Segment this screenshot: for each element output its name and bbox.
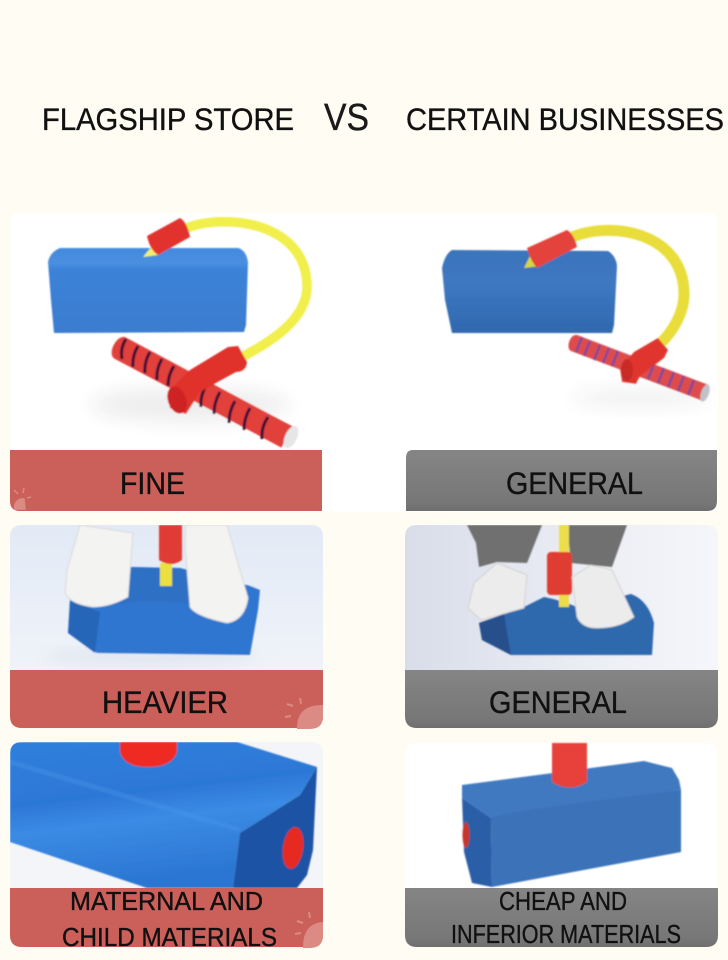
icon: foam block top — [462, 761, 681, 818]
panel: generic product, general — [442, 230, 712, 408]
label bar: general (row 1): GENERAL — [506, 465, 643, 501]
label bar: cheap and inferior materials: CHEAP AND — [499, 886, 627, 916]
photo contents — [10, 742, 317, 888]
photo contents — [40, 525, 260, 663]
label bar: maternal and child materials: MATERNAL AND — [70, 886, 263, 916]
icon: yellow tube — [570, 230, 684, 344]
icon: block top face — [120, 566, 249, 603]
icon: foam block cut end — [233, 767, 317, 888]
label bar: fine — [10, 450, 322, 511]
panel: flagship, heavier photo — [10, 525, 323, 672]
title row — [42, 97, 724, 139]
heading: vs: VS — [324, 97, 369, 139]
label bar: fine: FINE — [120, 465, 185, 501]
label bar: cheap and inferior materials: INFERIOR MATERIALS — [451, 919, 681, 949]
icon: left shoe — [468, 563, 527, 620]
icon: red pole — [552, 743, 587, 788]
label bar: maternal and child materials — [10, 886, 323, 952]
floor shadow — [40, 651, 260, 663]
label bar: general (row 2) — [405, 670, 718, 728]
icon: yellow tip — [143, 245, 158, 257]
decoration: flower — [14, 488, 31, 509]
icon: block dark side — [68, 600, 100, 653]
icon: red grip on tube — [147, 218, 190, 255]
icon: yellow tube — [160, 563, 172, 586]
photo contents — [467, 525, 654, 655]
label bar: cheap and inferior materials — [405, 886, 718, 949]
label bar: heavier: HEAVIER — [102, 684, 228, 720]
icon: red pole — [159, 525, 182, 564]
photo contents — [462, 743, 681, 887]
icon: red hole — [462, 822, 470, 848]
icon: yellow pole — [559, 525, 569, 607]
icon: right shoe — [185, 525, 248, 623]
icon: handle — [108, 334, 302, 450]
icon: thick block — [68, 567, 260, 655]
icon: handle — [566, 333, 712, 403]
icon: right trouser leg — [567, 525, 627, 567]
icon: foam block front — [491, 790, 681, 887]
heading: flagship store: FLAGSHIP STORE — [42, 101, 294, 137]
icon: squashed block — [479, 594, 654, 655]
product shadow — [90, 387, 290, 423]
icon: left shoe — [65, 525, 133, 607]
label bar: heavier — [10, 670, 323, 728]
panel: generic, general photo — [405, 525, 718, 672]
icon: left trouser leg — [467, 525, 542, 567]
icon: red pole — [120, 742, 177, 767]
icon: block dark end — [479, 614, 511, 655]
icon: right shoe — [572, 565, 634, 628]
icon: foam block top and front — [10, 742, 317, 888]
icon: foam block end — [462, 798, 492, 887]
icon: foam block — [442, 250, 617, 333]
icon: red hole — [280, 826, 306, 870]
panel: generic material photo — [405, 743, 718, 890]
label bar: general (row 1) — [406, 450, 717, 511]
icon: yellow tip — [524, 252, 540, 268]
product shadow — [570, 388, 710, 408]
icon: red grip on tube — [527, 230, 577, 268]
decoration: flower — [285, 698, 322, 728]
icon: block highlight edge — [11, 761, 158, 805]
panel: flagship material photo — [10, 742, 323, 890]
decoration: flower — [295, 912, 322, 947]
label bar: general (row 2): GENERAL — [489, 684, 627, 720]
icon: yellow tube — [184, 222, 307, 358]
panel: flagship product, fine — [48, 218, 307, 450]
icon: red sleeve — [547, 552, 572, 595]
panel: row 1 background — [10, 213, 718, 512]
icon: foam block — [48, 248, 248, 333]
label bar: maternal and child materials: CHILD MATERIALS — [62, 922, 277, 952]
